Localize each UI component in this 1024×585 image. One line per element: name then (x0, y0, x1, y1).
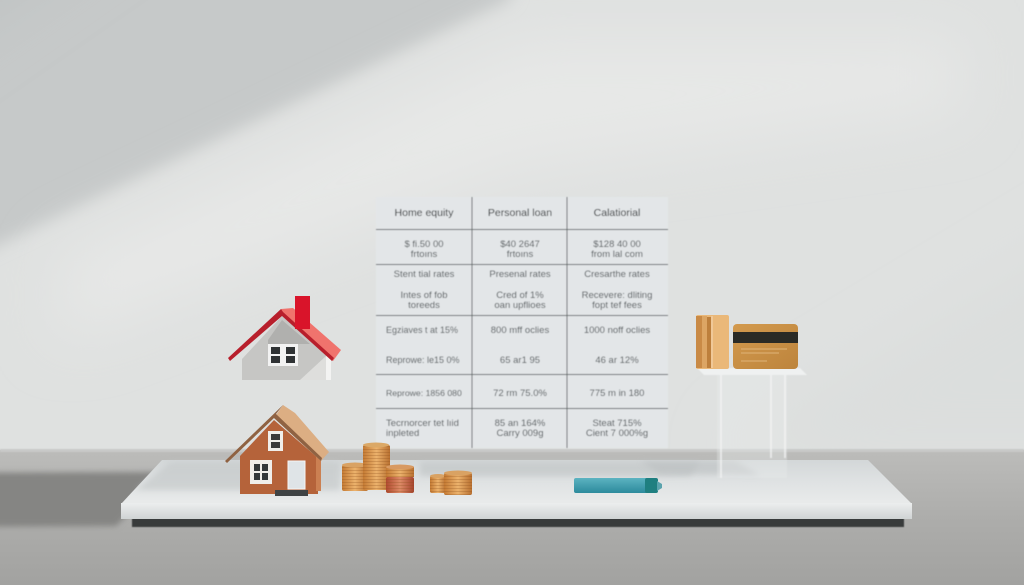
window (268, 344, 298, 366)
table body text: 65 ar1 95 (500, 355, 540, 366)
stack: tall (363, 442, 390, 490)
table headers: Calatiorial (594, 207, 640, 219)
table body text: frtoıns (411, 249, 437, 260)
icon: brown wooden house (225, 405, 329, 496)
table grid (376, 197, 668, 448)
table body text: Steat 715% (592, 418, 642, 429)
table body text: Recevere: dliting (582, 290, 652, 301)
stack: small (430, 474, 446, 493)
table body text: Reprowe: 1856 080 (386, 388, 462, 398)
table body text: Reprowe: le15 0% (386, 355, 460, 365)
icon: floating grey house with red roof (228, 296, 341, 380)
table body text: Cred of 1% (496, 290, 544, 301)
icon: gold credit card (733, 324, 798, 369)
table body text: 46 ar 12% (595, 355, 639, 366)
icon: teal pen (574, 478, 662, 493)
upper window (268, 431, 283, 451)
table body text: $40 2647 (500, 239, 540, 250)
chimney (295, 296, 310, 329)
table body text (386, 239, 652, 439)
table body text: 1000 noff oclies (584, 325, 650, 336)
table body text: fopt tef fees (592, 300, 642, 311)
table body text: Egziaves t at 15% (386, 325, 458, 335)
table body text: Cresarthe rates (584, 269, 650, 280)
table body text: Cient 7 000%g (586, 428, 648, 439)
table headers: Home equity (395, 207, 454, 219)
table body text: Intes of fob (400, 290, 448, 301)
table headers (395, 207, 640, 219)
stack: right (444, 470, 472, 495)
table body text: from lal com (591, 249, 643, 260)
table body text: 800 mff oclies (491, 325, 549, 336)
table body text: 85 an 164% (495, 418, 546, 429)
table body text: Presenal rates (489, 269, 551, 280)
table body text: $128 40 00 (593, 239, 641, 250)
table body text: 72 rm 75.0% (493, 388, 547, 399)
floor (0, 449, 1024, 585)
table body text: inpleted (386, 428, 419, 439)
table body text: Stent tial rates (394, 269, 455, 280)
stack: left (342, 462, 368, 491)
table body text: Tecrnorcer tet lıid (386, 418, 459, 429)
coin stacks (342, 442, 472, 495)
table body text: toreeds (408, 300, 440, 311)
platform (121, 460, 912, 527)
table body text: frtoıns (507, 249, 533, 260)
table headers: Personal loan (488, 207, 552, 219)
clear acrylic stand (697, 368, 807, 478)
comparison table (376, 197, 668, 448)
table panel (376, 197, 668, 448)
stack: red and copper (386, 464, 414, 493)
door (288, 461, 305, 489)
table body text: Carry 009g (496, 428, 544, 439)
wall background (0, 0, 1024, 452)
table body text: oan upflioes (494, 300, 546, 311)
table body text: 775 m in 180 (590, 388, 644, 399)
icon: stacked gold cards (696, 315, 729, 369)
lower window (250, 460, 272, 484)
table body text: $ fi.50 00 (404, 239, 444, 250)
